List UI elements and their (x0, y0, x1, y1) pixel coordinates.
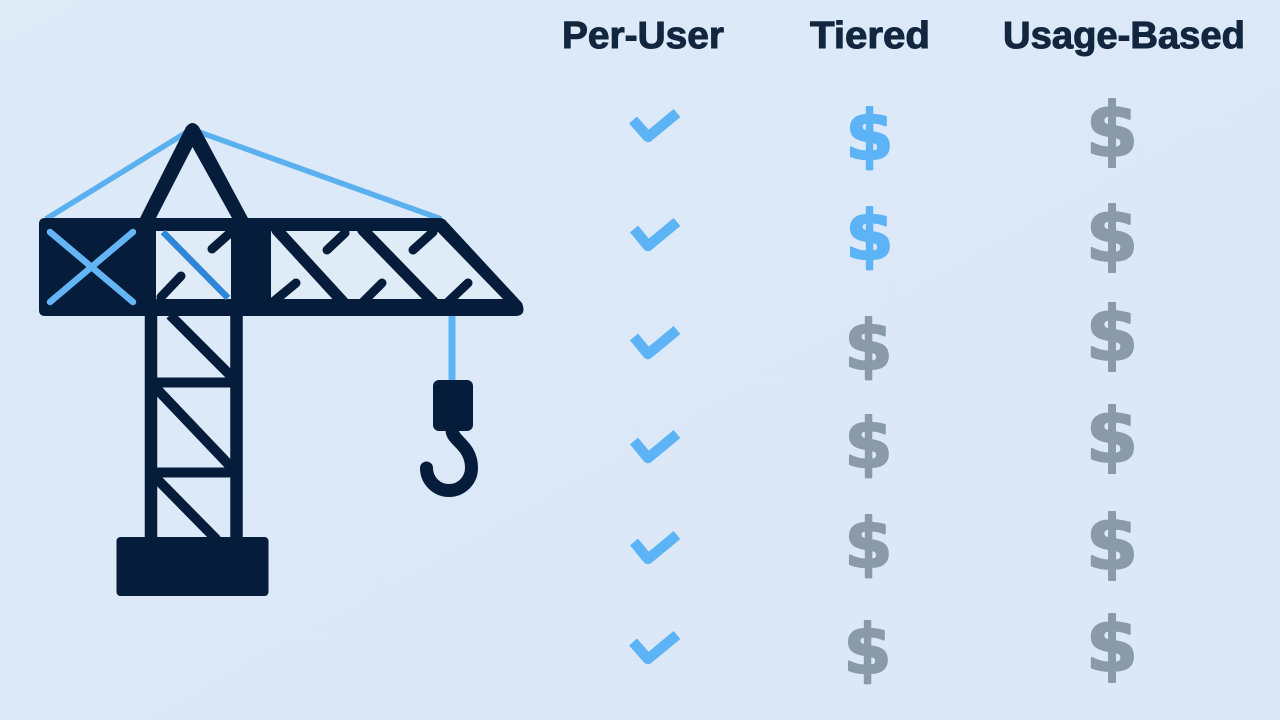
jib boom (39, 218, 523, 316)
dollar row 4: $ (1086, 392, 1138, 480)
dollar row 5: $ (1086, 499, 1138, 587)
blue window brace (163, 232, 228, 298)
hook curve (426, 430, 472, 491)
boom truss bracing (161, 230, 468, 302)
column headings (562, 15, 1245, 57)
mast tower (151, 312, 236, 540)
heading: usage-based: Usage-Based (1003, 15, 1245, 57)
dollar row 1: $ (845, 96, 894, 176)
check row 4 (634, 434, 677, 458)
dollar row 6: $ (843, 610, 892, 690)
dollar row 5: $ (844, 504, 893, 584)
dollar row 2: $ (845, 196, 894, 276)
check row 3 (634, 330, 677, 354)
hook block (433, 380, 473, 431)
dollar row 4: $ (844, 404, 893, 484)
check row 1 (633, 113, 677, 137)
blue x brace (50, 232, 133, 302)
tiered dollar signs (843, 96, 894, 690)
dollar row 3: $ (844, 306, 893, 386)
crane hook (426, 380, 473, 491)
counterweight base (116, 537, 268, 596)
dollar row 2: $ (1086, 191, 1138, 279)
per-user check marks (633, 113, 677, 659)
hoist rope (448, 314, 456, 382)
crane illustration (39, 123, 523, 596)
heading: per-user: Per-User (562, 15, 724, 57)
boom silhouette (39, 218, 523, 316)
check row 5 (634, 535, 677, 559)
check row 6 (633, 635, 677, 659)
support cables (46, 132, 441, 219)
dollar row 1: $ (1086, 86, 1138, 174)
a-frame peak (139, 123, 249, 220)
dollar row 6: $ (1086, 601, 1138, 689)
boom windows (156, 231, 503, 299)
dollar row 3: $ (1086, 290, 1138, 378)
usage-based dollar signs (1086, 86, 1138, 689)
heading: tiered: Tiered (810, 15, 930, 57)
check row 2 (634, 222, 677, 246)
